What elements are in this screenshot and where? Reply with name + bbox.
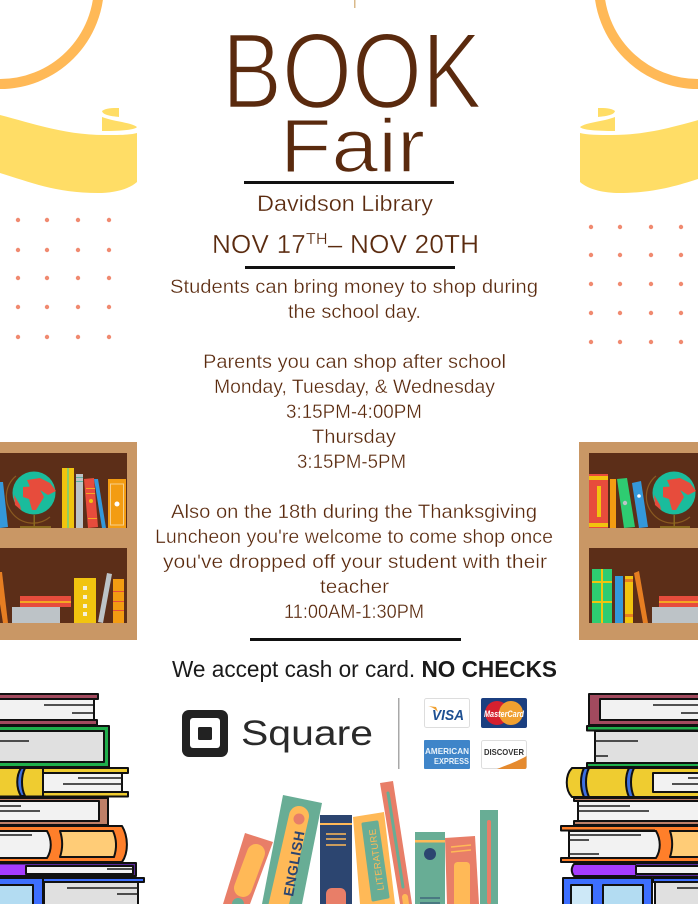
left bookshelf [0, 442, 137, 640]
title [222, 10, 482, 189]
american express card [424, 740, 470, 769]
literature book: LITERATURE [367, 828, 387, 891]
parent hours: 3:15PM-4:00PM [286, 402, 422, 423]
green book [587, 726, 698, 767]
visa card: VISA [432, 707, 464, 724]
payment note: We accept cash or card. NO CHECKS [172, 656, 557, 682]
square logo [182, 710, 373, 757]
yellow book [567, 768, 698, 797]
title: Fair [280, 104, 425, 189]
right ribbon [580, 108, 698, 193]
tall green book [480, 810, 498, 904]
parent hours: Thursday [312, 427, 397, 448]
center book row [223, 781, 498, 904]
dates: TH [306, 231, 328, 248]
left corner arc [0, 0, 99, 84]
purple book [572, 864, 698, 876]
brown book [574, 798, 698, 825]
square logo: Square [241, 714, 373, 753]
title: BOOK [222, 10, 482, 131]
right corner arc [599, 0, 698, 84]
parent hours: 3:15PM-5PM [297, 452, 406, 473]
icon: globe [646, 472, 696, 528]
coral short book [445, 836, 479, 904]
maroon book [0, 694, 98, 725]
location: Davidson Library [257, 191, 433, 216]
green book [415, 832, 445, 904]
luncheon note: you've dropped off your student with their [163, 552, 548, 573]
parent hours [203, 352, 506, 473]
dates: NOV 17 [212, 229, 306, 259]
left dot grid [16, 218, 111, 339]
luncheon note [155, 502, 553, 623]
student note [170, 277, 538, 323]
luncheon note: teacher [320, 577, 390, 598]
green book [0, 726, 109, 767]
discover card: DISCOVER [484, 747, 524, 757]
discover card [482, 740, 526, 769]
purple book [0, 863, 136, 876]
tall coral book [380, 781, 412, 904]
blue book [563, 878, 698, 904]
luncheon note: 11:00AM-1:30PM [284, 602, 424, 623]
left book stack [0, 694, 144, 904]
dates: – NOV 20TH [328, 229, 479, 259]
blue book [0, 878, 144, 904]
mastercard card [481, 698, 527, 728]
navy book [320, 815, 352, 904]
english book [262, 795, 322, 904]
visa card [424, 698, 470, 728]
american express card: EXPRESS [434, 756, 469, 766]
right dot grid [589, 225, 683, 344]
right bookshelf [579, 442, 698, 640]
yellow book [0, 768, 128, 796]
parent hours: Monday, Tuesday, & Wednesday [214, 377, 495, 398]
luncheon note: Also on the 18th during the Thanksgiving [171, 502, 537, 523]
student note: the school day. [288, 302, 421, 323]
left ribbon [0, 108, 137, 193]
brown book [0, 798, 108, 825]
coral book [223, 833, 273, 904]
maroon book [589, 694, 698, 725]
luncheon note: Luncheon you're welcome to come shop once [155, 527, 553, 548]
literature book [353, 812, 395, 904]
mastercard card: MasterCard [484, 709, 524, 719]
american express card: AMERICAN [425, 746, 469, 756]
orange book [0, 826, 127, 862]
parent hours: Parents you can shop after school [203, 352, 506, 373]
icon: globe [6, 472, 56, 528]
english book: ENGLISH [280, 830, 307, 898]
student note: Students can bring money to shop during [170, 277, 538, 298]
right book stack [561, 694, 698, 904]
orange book [561, 826, 698, 862]
